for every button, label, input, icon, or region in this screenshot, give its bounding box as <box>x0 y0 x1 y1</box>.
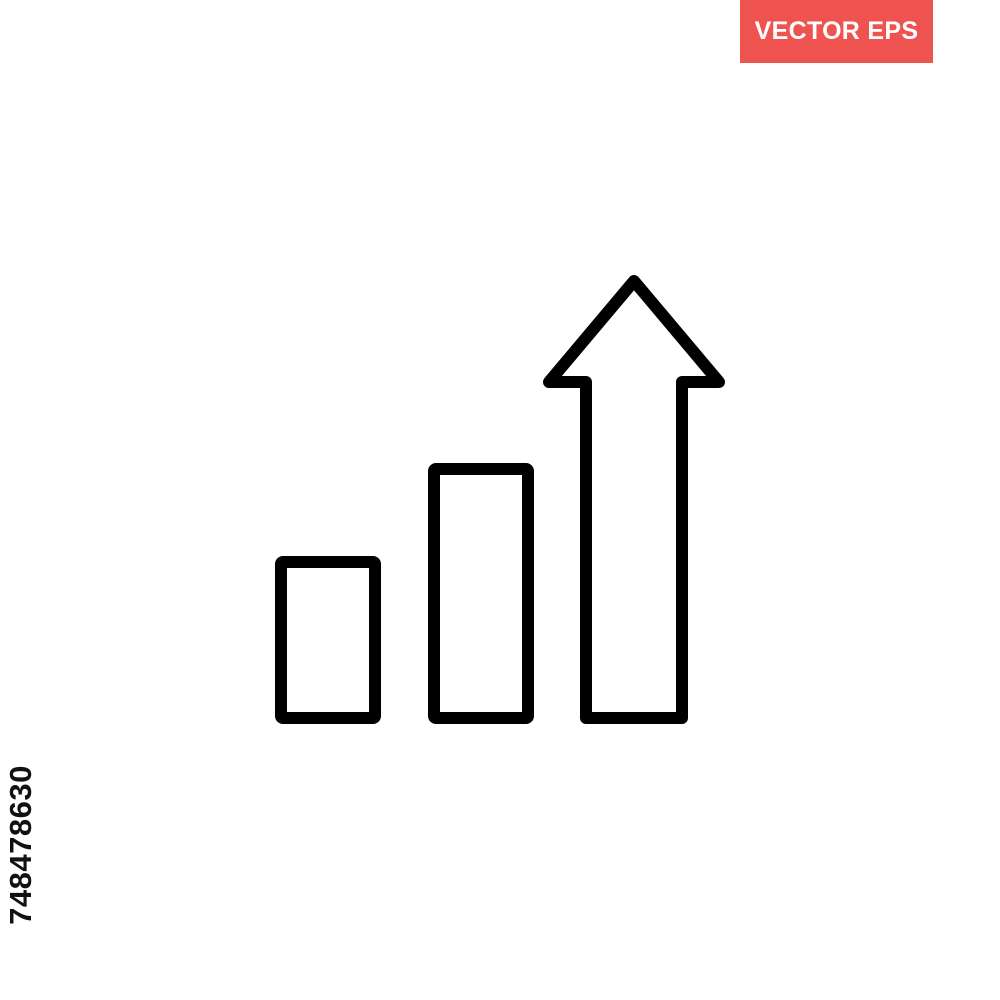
stock id text: 748478630 <box>3 765 38 925</box>
badge: vector eps: VECTOR EPS <box>755 17 918 45</box>
badge: vector eps <box>740 0 933 63</box>
arrow bar <box>549 281 719 718</box>
medium bar <box>434 469 528 718</box>
small bar <box>281 562 375 718</box>
